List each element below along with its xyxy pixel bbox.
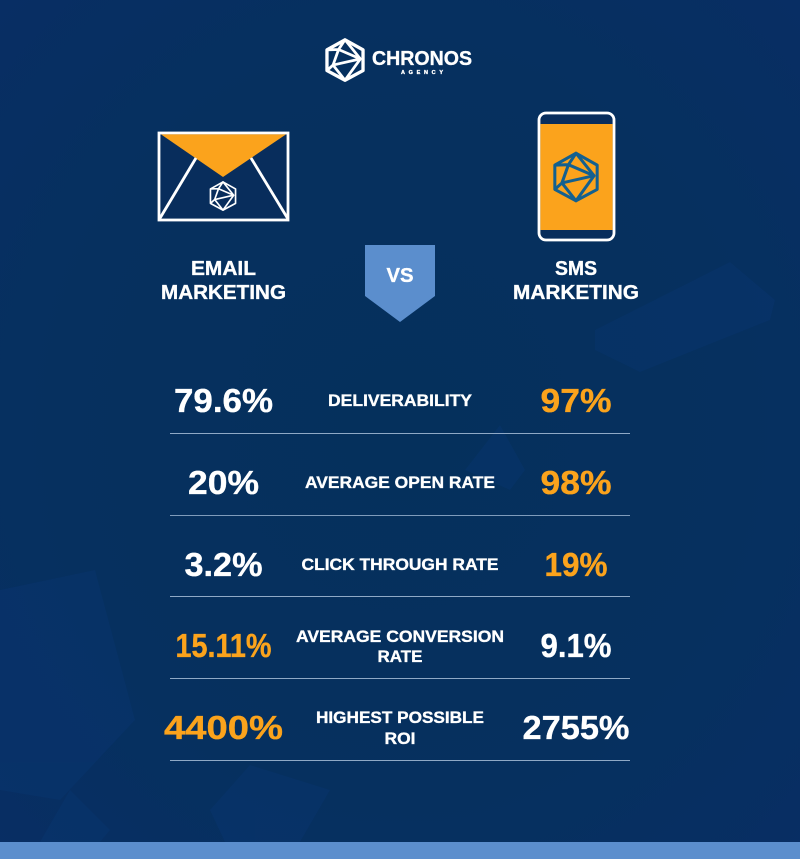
row: highest possible ROI <box>164 708 630 761</box>
logo wordmark: CHRONOS <box>372 48 472 70</box>
heading: Email Marketing <box>161 258 286 304</box>
row: deliverability: 79.6% <box>174 382 273 419</box>
logo tagline: AGENCY <box>401 70 443 76</box>
row: average conversion rate: RATE <box>378 647 422 666</box>
row: average conversion rate: AVERAGE CONVERSION <box>296 627 504 646</box>
footer bar <box>0 842 800 859</box>
row: average conversion rate: 15.11% <box>176 627 272 664</box>
heading: SMS Marketing: SMS <box>555 258 597 280</box>
row: click through rate: CLICK THROUGH RATE <box>302 555 498 574</box>
row: average open rate <box>170 464 630 516</box>
row: click through rate: 3.2% <box>184 546 262 583</box>
icon: phone hexagon logo <box>555 153 597 201</box>
heading: Email Marketing: EMAIL <box>191 258 256 280</box>
row: average open rate: AVERAGE OPEN RATE <box>305 473 495 492</box>
row: highest possible ROI: 2755% <box>522 709 630 746</box>
row: click through rate <box>170 546 630 597</box>
icon: Chronos hexagon logo <box>327 40 363 80</box>
row: deliverability: DELIVERABILITY <box>328 391 473 410</box>
row: average conversion rate <box>170 627 630 679</box>
row: average conversion rate: 9.1% <box>540 627 612 664</box>
icon: envelope <box>159 133 288 220</box>
icon: smartphone <box>539 113 614 240</box>
row: highest possible ROI: ROI <box>384 729 416 748</box>
heading: SMS Marketing: MARKETING <box>513 282 639 304</box>
row: click through rate: 19% <box>544 546 608 583</box>
heading: Email Marketing: MARKETING <box>161 282 286 304</box>
row: average open rate: 20% <box>188 464 259 501</box>
row: deliverability <box>170 382 630 434</box>
row: deliverability: 97% <box>540 382 612 419</box>
icon: envelope hexagon logo <box>210 182 236 210</box>
logo: Chronos Agency <box>327 40 472 80</box>
row: highest possible ROI: HIGHEST POSSIBLE <box>316 708 484 727</box>
heading: SMS Marketing <box>513 258 639 304</box>
badge: VS: VS <box>386 265 414 287</box>
row: highest possible ROI: 4400% <box>164 709 283 746</box>
badge: VS <box>365 245 435 322</box>
row: average open rate: 98% <box>540 464 612 501</box>
